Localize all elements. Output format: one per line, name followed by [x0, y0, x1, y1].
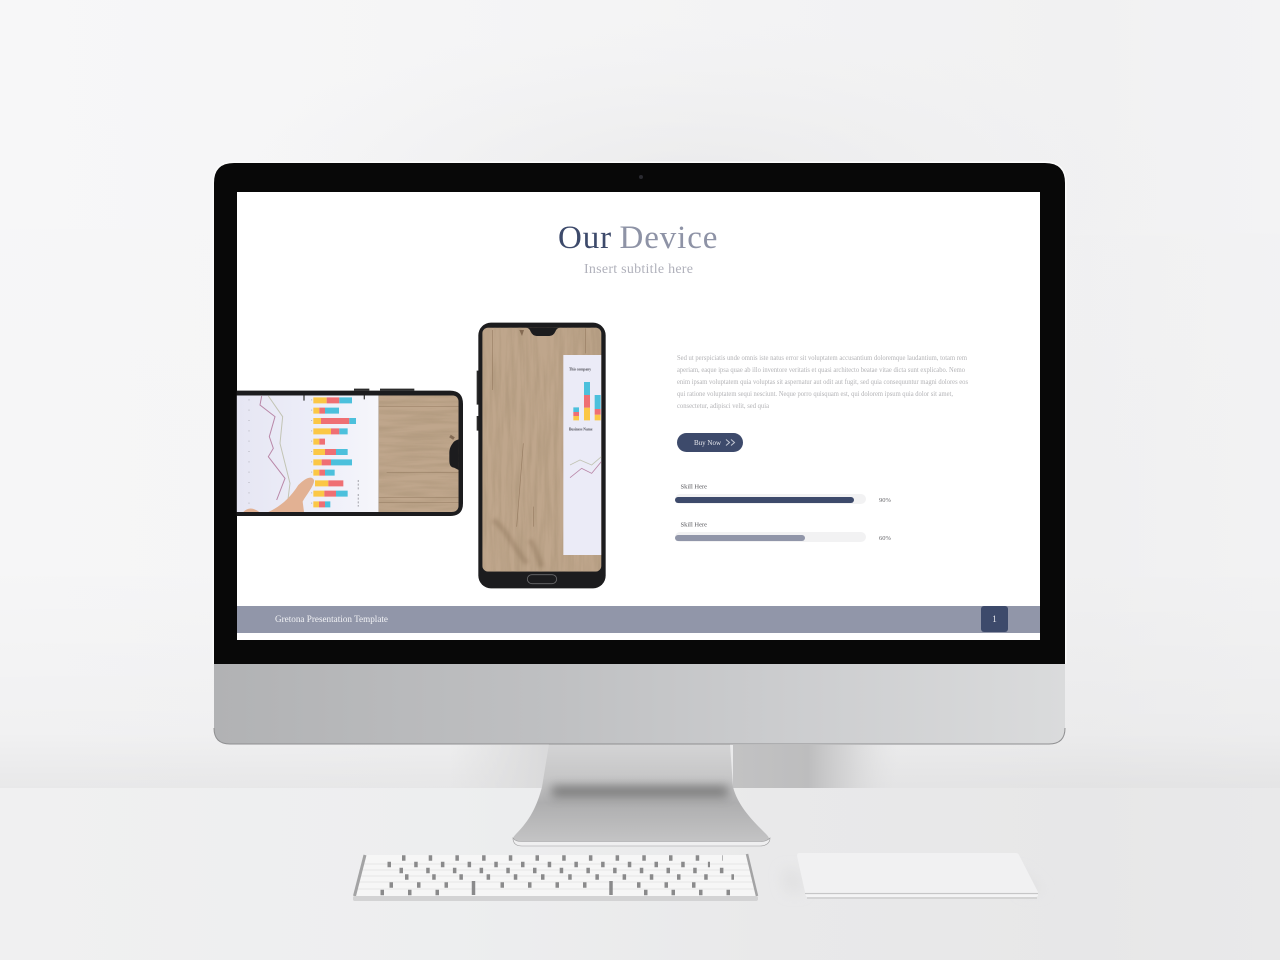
slide screen	[237, 192, 1040, 640]
subtitle: Insert subtitle here	[584, 262, 693, 277]
button: buy now	[677, 433, 743, 452]
body text: enim ipsam voluptatem quia voluptas sit aspernatur aut odit aut fugit, sed quia consequuntur magni dolores eos	[677, 379, 968, 386]
portrait phone	[477, 323, 606, 588]
title: Device	[620, 220, 718, 256]
body text	[677, 355, 968, 410]
label: business name: Business Name	[569, 428, 593, 432]
skill bar 2	[675, 522, 892, 542]
webcam	[639, 175, 643, 179]
keyboard	[353, 854, 758, 901]
skill bar 1	[675, 484, 892, 504]
page number: 1	[992, 614, 997, 624]
axis ticks	[304, 395, 364, 401]
trackpad	[782, 853, 1045, 898]
page number	[981, 606, 1008, 632]
body text: Sed ut perspiciatis unde omnis iste natus error sit voluptatem accusantium doloremque laudantium, totam rem	[677, 355, 968, 362]
monitor chin	[214, 664, 1065, 744]
notch	[449, 439, 459, 470]
skill bar 2: 60%	[879, 535, 892, 542]
hand	[243, 478, 314, 512]
phone screen content	[237, 395, 459, 512]
notch	[526, 328, 560, 336]
bar chart	[573, 382, 601, 420]
key gaps	[380, 858, 735, 895]
line chart	[570, 457, 601, 478]
label: this company: This company	[569, 367, 591, 371]
body text: aperiam, eaque ipsa quae ab illo inventore veritatis et quasi architecto beatae vitae dicta sunt explicabo. Nemo	[677, 367, 966, 374]
line chart	[260, 396, 290, 510]
stacked bar chart	[313, 397, 356, 507]
monitor stand	[513, 744, 770, 846]
phone body	[237, 389, 463, 516]
skill bar 2: Skill Here	[680, 522, 707, 528]
button: buy now: Buy Now	[694, 439, 722, 447]
body text: qui ratione voluptatem sequi nesciunt. Neque porro quisquam est, qui dolorem ipsum quia dolor sit amet,	[677, 391, 953, 398]
monitor bezel	[214, 163, 1065, 664]
phone body	[477, 323, 606, 588]
phone screen content	[482, 328, 601, 572]
footer bar: Gretona Presentation Template	[275, 615, 388, 625]
skill bar 1: 90%	[879, 497, 892, 504]
footer bar	[237, 606, 1040, 633]
body text: consectetur, adipisci velit, sed quia	[677, 403, 769, 410]
home button	[527, 575, 557, 584]
landscape phone	[237, 389, 463, 516]
skill bar 1: Skill Here	[680, 484, 707, 490]
title: Our	[558, 220, 612, 256]
